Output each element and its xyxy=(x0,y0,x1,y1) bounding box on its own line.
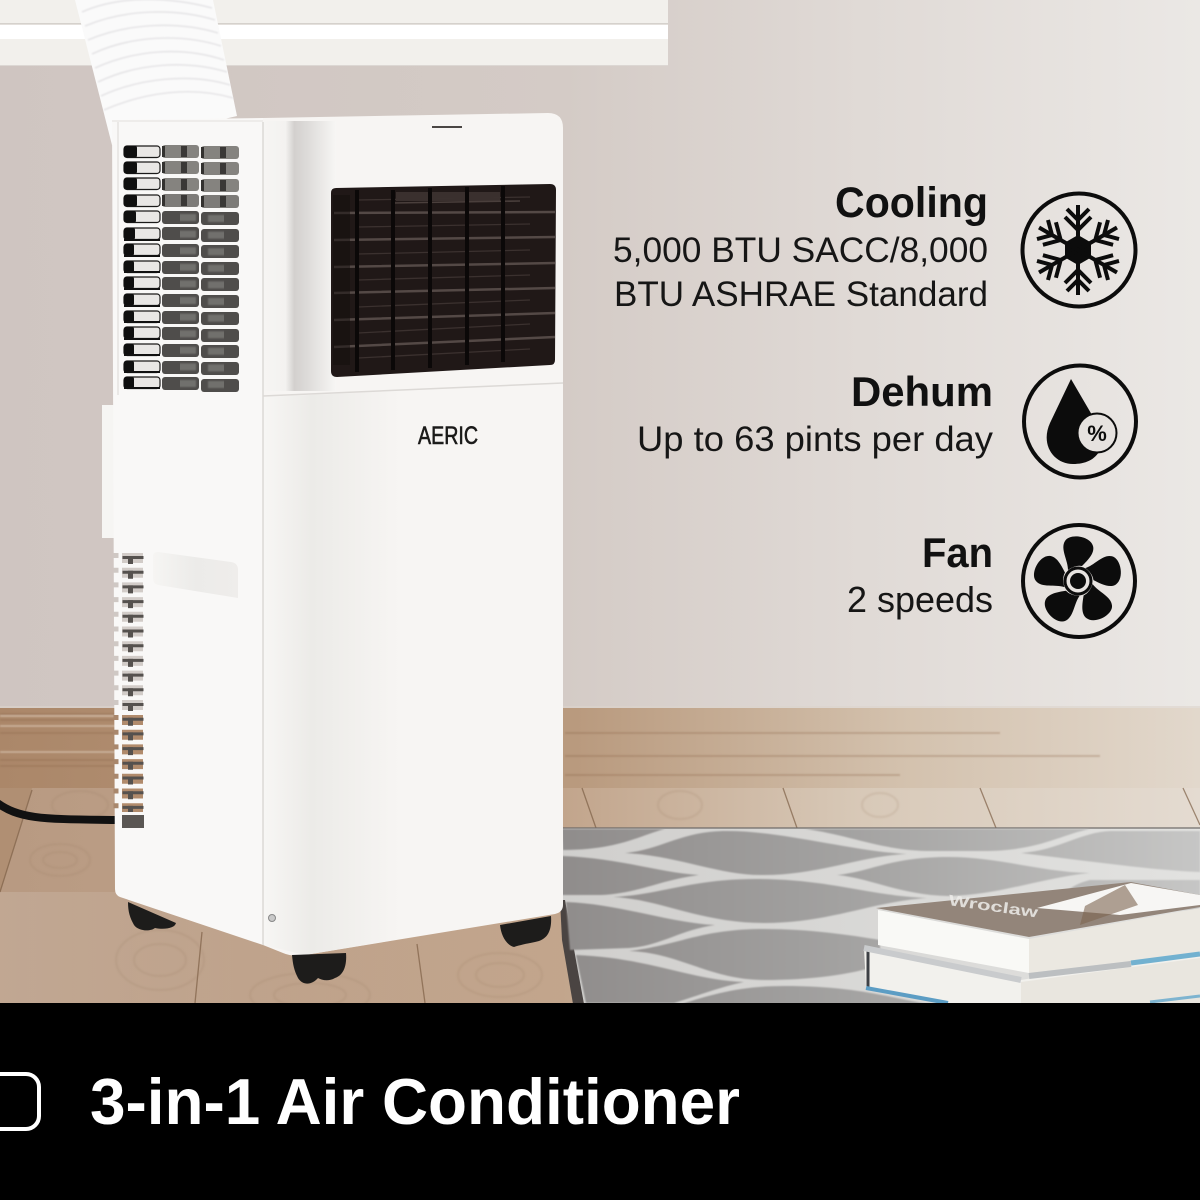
cooling description: BTU ASHRAE Standard xyxy=(614,275,988,314)
patterned rug xyxy=(560,827,1200,1004)
feature: cooling xyxy=(613,179,1136,314)
bottom title bar xyxy=(0,1003,1200,1200)
brand logo: AERIC xyxy=(418,422,478,450)
upper book xyxy=(876,882,1200,976)
wooden baseboard xyxy=(0,706,1200,790)
lower book xyxy=(864,948,1200,1004)
side bracket xyxy=(102,405,122,538)
feature: dehumidifying xyxy=(637,366,1136,478)
books xyxy=(864,882,1200,1004)
portable air conditioner unit xyxy=(102,113,563,984)
feature: fan xyxy=(847,525,1135,637)
fan heading: Fan xyxy=(922,529,993,576)
front panel xyxy=(263,113,563,956)
corner shading lower xyxy=(264,391,400,955)
title: 3-in-1 Air Conditioner xyxy=(90,1065,740,1138)
power cord xyxy=(0,802,118,820)
caster wheels xyxy=(128,902,551,984)
corner shading upper xyxy=(264,121,336,391)
dehum description: Up to 63 pints per day xyxy=(637,420,994,459)
rug edge binding xyxy=(560,900,584,1004)
cooling description: 5,000 BTU SACC/8,000 xyxy=(613,231,988,270)
icon: fan xyxy=(1023,525,1135,637)
cooling description xyxy=(613,231,988,314)
window with frame xyxy=(0,0,668,66)
dehum heading: Dehum xyxy=(851,368,993,415)
left side panel xyxy=(112,118,263,945)
book cover title: Wroclaw xyxy=(947,892,1039,922)
lower intake vents xyxy=(116,553,144,828)
percent sign: % xyxy=(1087,421,1107,446)
icon: rounded outline badge xyxy=(0,1074,39,1129)
handle recess xyxy=(153,552,238,598)
background wall xyxy=(0,0,1200,712)
top-left exhaust vents xyxy=(124,145,239,392)
icon: water drop with percent xyxy=(1024,366,1136,478)
white hose xyxy=(75,0,237,145)
rug lens pattern xyxy=(562,829,1200,1004)
cooling heading: Cooling xyxy=(835,179,988,227)
wood floor xyxy=(0,788,1200,1017)
front air outlet grille xyxy=(331,184,556,377)
screw detail xyxy=(268,914,276,922)
fan description: 2 speeds xyxy=(847,579,993,620)
icon: snowflake xyxy=(1022,194,1136,306)
